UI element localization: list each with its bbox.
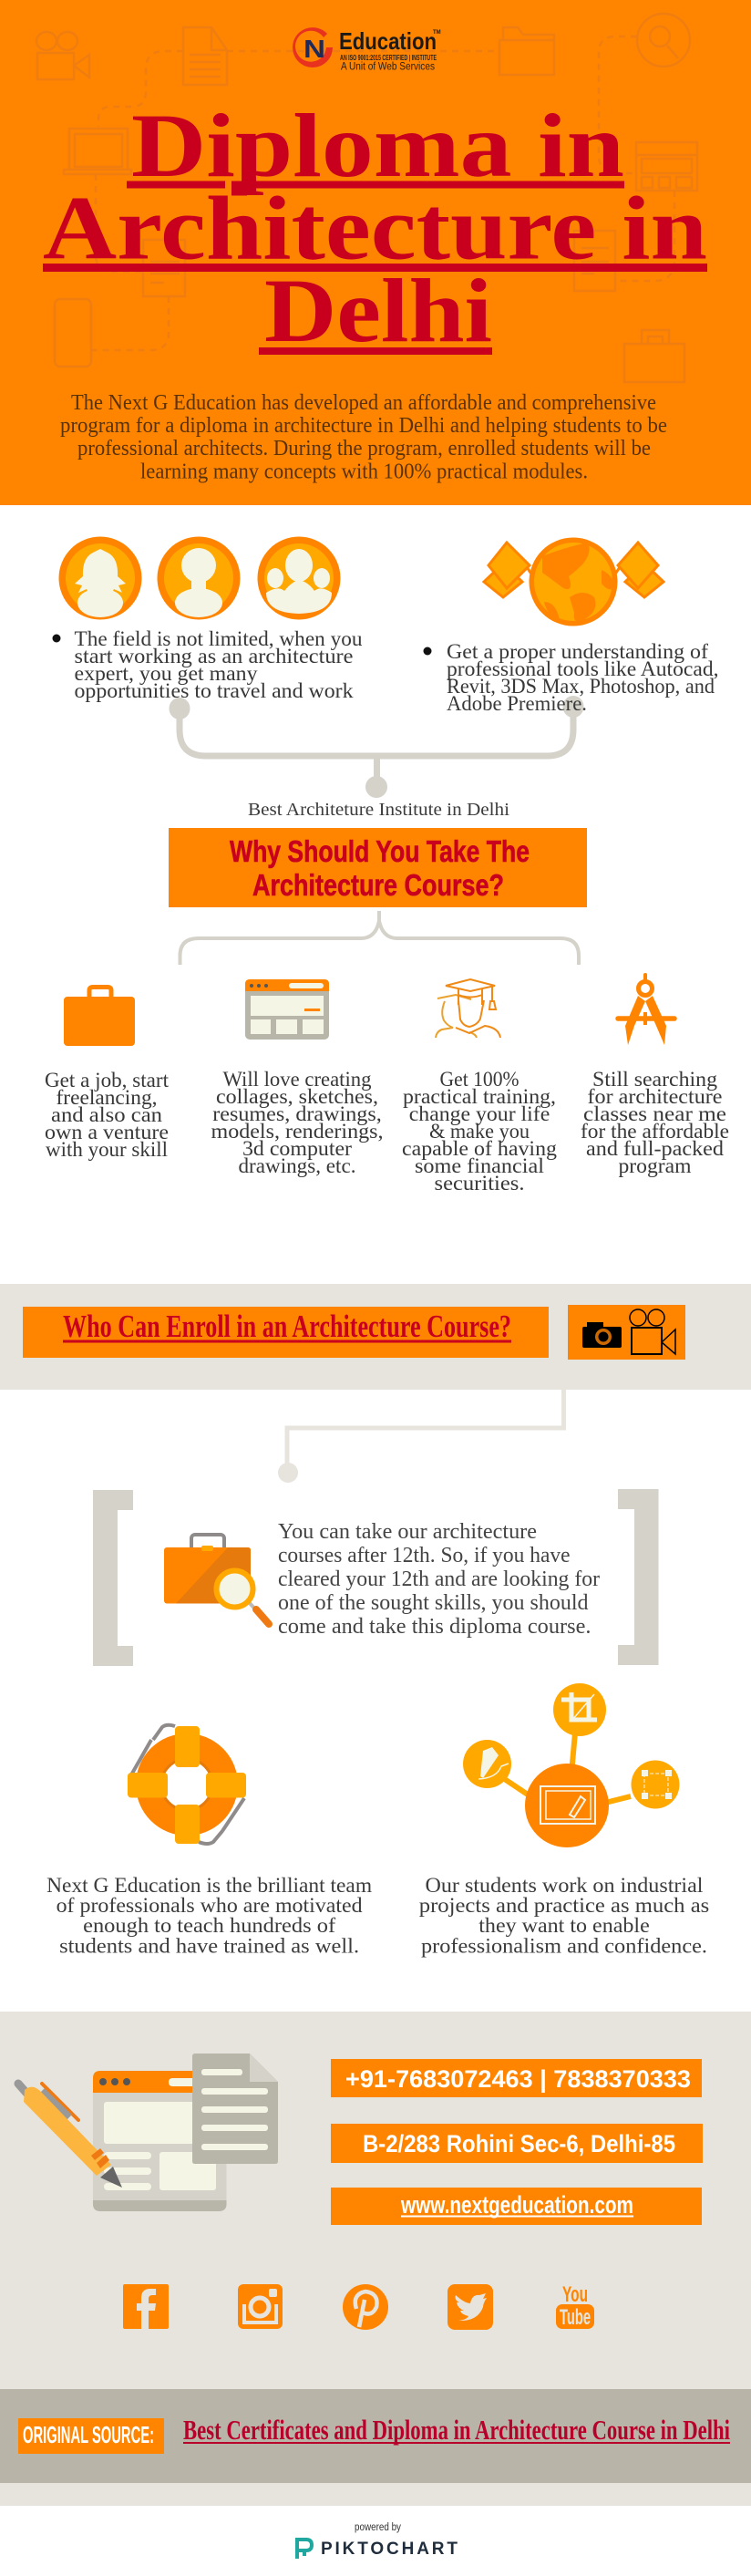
panel: team and projects — [46, 1683, 709, 1957]
text: professional tools: Revit, 3DS Max, Photoshop, and — [447, 675, 715, 698]
text: reason 3: change your life — [409, 1102, 550, 1126]
title: Architecture in — [43, 177, 707, 279]
text: projects: professionalism and confidence. — [421, 1935, 707, 1957]
text: reason 4: program — [618, 1154, 691, 1178]
icon: youtube: You — [562, 2282, 588, 2307]
callout text: one of the sought skills, you should — [278, 1591, 589, 1615]
original source label — [18, 2418, 164, 2454]
icon: facebook — [123, 2284, 169, 2329]
website bar — [331, 2188, 702, 2225]
callout text — [278, 1520, 600, 1639]
callout text: come and take this diploma course. — [278, 1615, 591, 1639]
address bar: B-2/283 Rohini Sec-6, Delhi-85 — [363, 2130, 675, 2157]
address bar — [331, 2124, 703, 2163]
icon: life buoy — [128, 1725, 246, 1844]
heading: who can enroll — [23, 1307, 549, 1358]
piktochart branding: PIKTOCHART — [321, 2540, 458, 2559]
social icons — [123, 2282, 594, 2330]
text: reason 4: Still searching — [592, 1068, 717, 1091]
text: projects — [419, 1874, 709, 1957]
text: reason 4: for the affordable — [581, 1120, 729, 1143]
connector bracket — [170, 696, 583, 798]
logo: Next G Education — [293, 27, 441, 73]
intro paragraph: program for a diploma in architecture in Delhi and helping students to be — [60, 414, 667, 438]
phone bar — [331, 2059, 702, 2097]
text: reason 3: practical training, — [403, 1085, 556, 1109]
text: reason 1: Get a job, start — [45, 1069, 169, 1092]
panel: contact footer — [0, 2012, 751, 2506]
logo: Next G Education: AN ISO 9001:2015 CERTIFIED | INSTITUTE — [340, 54, 437, 62]
text: reason 3: some financial — [415, 1154, 544, 1178]
icon: graduates — [436, 979, 500, 1038]
background decorative line icons — [36, 14, 697, 382]
text: reason 2: 3d computer — [242, 1137, 352, 1161]
icon: briefcase with magnifier — [164, 1535, 269, 1624]
right bracket — [618, 1489, 658, 1665]
heading: who can enroll: Who Can Enroll in an Architecture Course? — [63, 1309, 511, 1344]
panel: who can enroll band — [0, 1284, 751, 1390]
text: professional tools: professional tools like Autocad, — [447, 657, 718, 681]
panel: header — [0, 0, 751, 505]
intro paragraph: learning many concepts with 100% practical modules. — [140, 460, 588, 483]
piktochart branding — [297, 2522, 458, 2559]
text: projects: projects and practice as much as — [419, 1894, 709, 1917]
panel: four reasons — [45, 973, 729, 1195]
panel: two benefits — [53, 536, 718, 798]
text: reason 2 — [211, 1068, 383, 1178]
callout text: courses after 12th. So, if you have — [278, 1544, 571, 1567]
text: team: enough to teach hundreds of — [83, 1914, 335, 1937]
icon: briefcase — [64, 987, 135, 1046]
title — [43, 95, 707, 361]
logo: Next G Education: TM — [433, 30, 441, 36]
text: reason 4: and full-packed — [586, 1137, 724, 1161]
icon: youtube: Tube — [560, 2305, 591, 2330]
connector to callout — [278, 1390, 563, 1483]
heading: why should you take: Why Should You Take The — [230, 834, 530, 868]
icon: design tools network — [463, 1683, 680, 1847]
text: professional tools: Get a proper understanding of — [447, 640, 708, 664]
text: field not limited: opportunities to travel and work — [75, 679, 354, 703]
text: reason 3: securities. — [434, 1172, 525, 1195]
heading: why should you take — [169, 828, 587, 907]
piktochart branding: powered by — [355, 2522, 401, 2533]
text: reason 1: own a venture — [45, 1121, 169, 1144]
intro paragraph: The Next G Education has developed an affordable and comprehensive — [71, 391, 656, 415]
phone bar: +91-7683072463 | 7838370333 — [345, 2065, 691, 2093]
text: reason 3: Get 100% — [439, 1068, 520, 1091]
text: field not limited — [53, 627, 363, 703]
title: Diploma in — [131, 95, 624, 196]
text: projects: Our students work on industrial — [425, 1874, 704, 1897]
text: reason 1: freelancing, — [57, 1086, 157, 1110]
text: field not limited: expert, you get many — [75, 662, 258, 686]
icon: pinterest — [343, 2284, 388, 2330]
text: reason 1 — [45, 1069, 169, 1162]
left bracket — [93, 1490, 133, 1666]
logo: Next G Education: N — [303, 35, 325, 63]
text: professional tools — [423, 640, 718, 716]
icon: drafting compass — [618, 973, 674, 1045]
icon: twitter — [448, 2284, 493, 2330]
caption: best institute: Best Architeture Institute in Delhi — [248, 800, 509, 820]
text: field not limited: The field is not limited, when you — [75, 627, 363, 651]
callout text: You can take our architecture — [278, 1520, 537, 1544]
text: reason 3 — [402, 1068, 557, 1195]
text: reason 1: with your skill — [46, 1138, 168, 1162]
intro paragraph — [60, 391, 667, 483]
heading: why should you take: Architecture Course? — [252, 868, 504, 902]
icon: web window — [245, 979, 329, 1040]
icon: camera and video camera — [568, 1305, 685, 1360]
brace connector — [180, 911, 579, 965]
text: reason 2: collages, sketches, — [216, 1085, 378, 1109]
text: reason 2: models, renderings, — [211, 1120, 383, 1143]
text: team: of professionals who are motivated — [57, 1894, 363, 1917]
logo: Next G Education: A Unit of Web Services — [341, 62, 435, 73]
text: team: Next G Education is the brilliant team — [46, 1874, 372, 1897]
callout text: cleared your 12th and are looking for — [278, 1567, 600, 1591]
text: reason 2: Will love creating — [222, 1068, 372, 1091]
text: professional tools: Adobe Premiere. — [447, 692, 587, 716]
original source label: ORIGINAL SOURCE: — [23, 2421, 154, 2448]
icon: browser, document and pen — [18, 2054, 278, 2211]
source band — [0, 2389, 751, 2483]
panel: callout with brackets — [93, 1489, 658, 1666]
icon: instagram — [238, 2284, 283, 2329]
text: team — [46, 1874, 372, 1957]
icon: globe with flags — [484, 538, 664, 626]
text: reason 2: drawings, etc. — [239, 1154, 355, 1178]
intro paragraph: professional architects. During the program, enrolled students will be — [77, 437, 651, 460]
text: reason 4: for architecture — [587, 1085, 722, 1109]
text: reason 4: classes near me — [583, 1102, 726, 1126]
logo: Next G Education: Education — [339, 27, 437, 55]
text: reason 2: resumes, drawings, — [212, 1102, 382, 1126]
text: reason 4 — [581, 1068, 729, 1178]
text: reason 1: and also can — [51, 1103, 162, 1127]
website bar: www.nextgeducation.com — [400, 2191, 633, 2219]
text: reason 3: & make you — [429, 1120, 530, 1143]
text: field not limited: start working as an architecture — [75, 645, 353, 668]
text: reason 3: capable of having — [402, 1137, 557, 1161]
icon: youtube — [556, 2282, 594, 2330]
title: Delhi — [264, 260, 492, 361]
text: team: students and have trained as well. — [59, 1935, 359, 1957]
icon: three people avatars — [58, 536, 341, 620]
text: projects: they want to enable — [478, 1914, 650, 1937]
